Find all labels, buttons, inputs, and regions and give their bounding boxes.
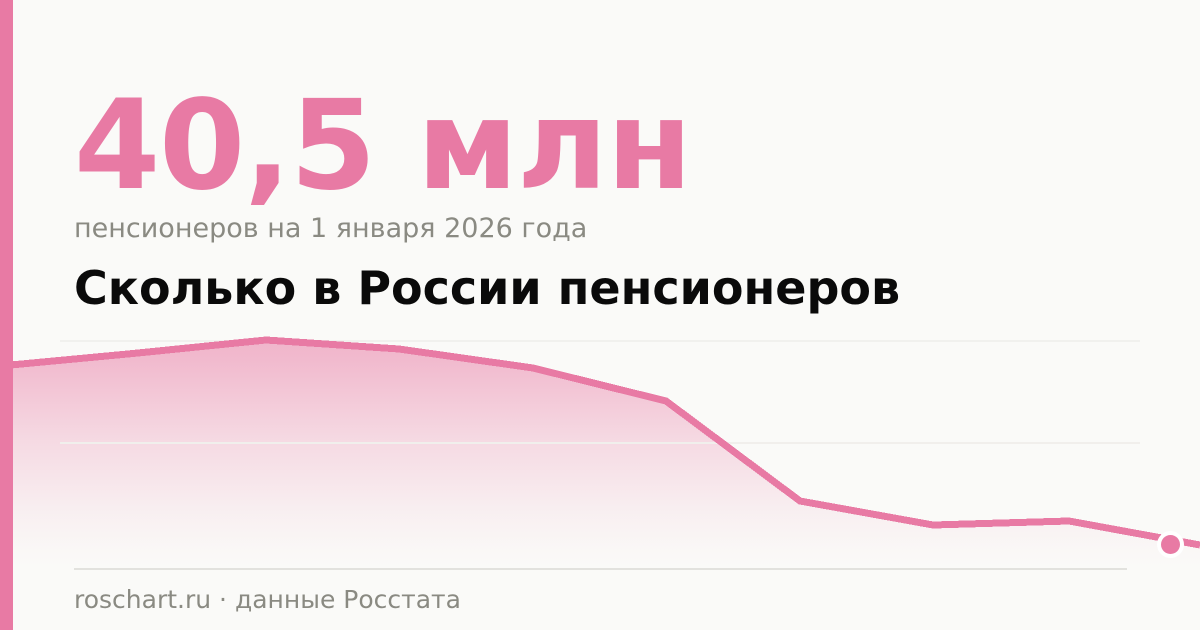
- accent bar: [0, 0, 13, 630]
- heading: Сколько в России пенсионеров: [74, 261, 900, 315]
- marker: latest value: [1157, 531, 1184, 558]
- subtitle: пенсионеров на 1 января 2026 года: [74, 213, 587, 244]
- footer source: roschart.ru · данные Росстата: [74, 585, 461, 614]
- footer rule: [74, 568, 1127, 570]
